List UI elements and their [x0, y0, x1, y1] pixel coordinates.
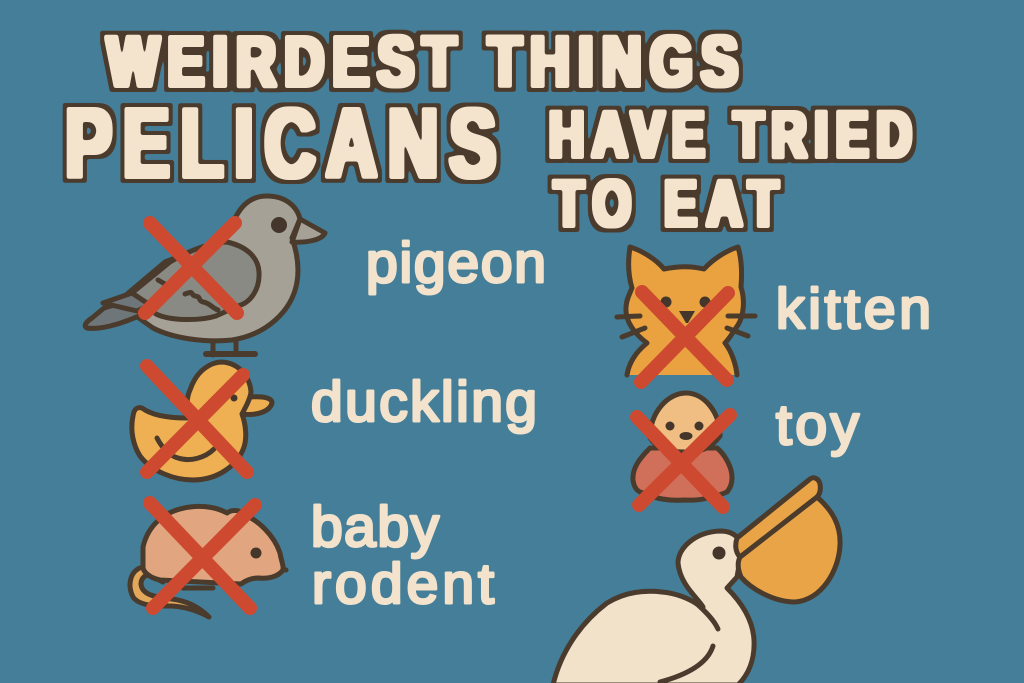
- cross mark: [641, 292, 728, 382]
- icon: duckling crossed out: [132, 362, 272, 480]
- label: duckling: duckling: [311, 370, 537, 434]
- title: TO EAT: [554, 167, 778, 241]
- label: kitten: kitten: [776, 277, 931, 341]
- title: [65, 22, 912, 241]
- title: HAVE TRIED: [549, 98, 912, 172]
- cross mark: [145, 223, 237, 313]
- label: pigeon: pigeon: [366, 231, 546, 295]
- label: baby rodent: baby: [311, 495, 440, 559]
- icon: kitten crossed out: [617, 247, 755, 382]
- label: baby rodent: [311, 495, 494, 616]
- icon: pelican: [553, 478, 840, 683]
- cross mark: [150, 503, 255, 608]
- cross mark: [147, 366, 247, 472]
- icon: toy crossed out: [633, 393, 732, 507]
- title: WEIRDEST THINGS: [107, 22, 738, 102]
- title: PELICANS: [65, 90, 496, 199]
- icon: pigeon crossed out: [85, 196, 325, 355]
- label: toy: toy: [776, 393, 860, 457]
- cross mark: [637, 415, 730, 507]
- label: baby rodent: rodent: [312, 552, 494, 616]
- icon: baby rodent crossed out: [130, 503, 286, 617]
